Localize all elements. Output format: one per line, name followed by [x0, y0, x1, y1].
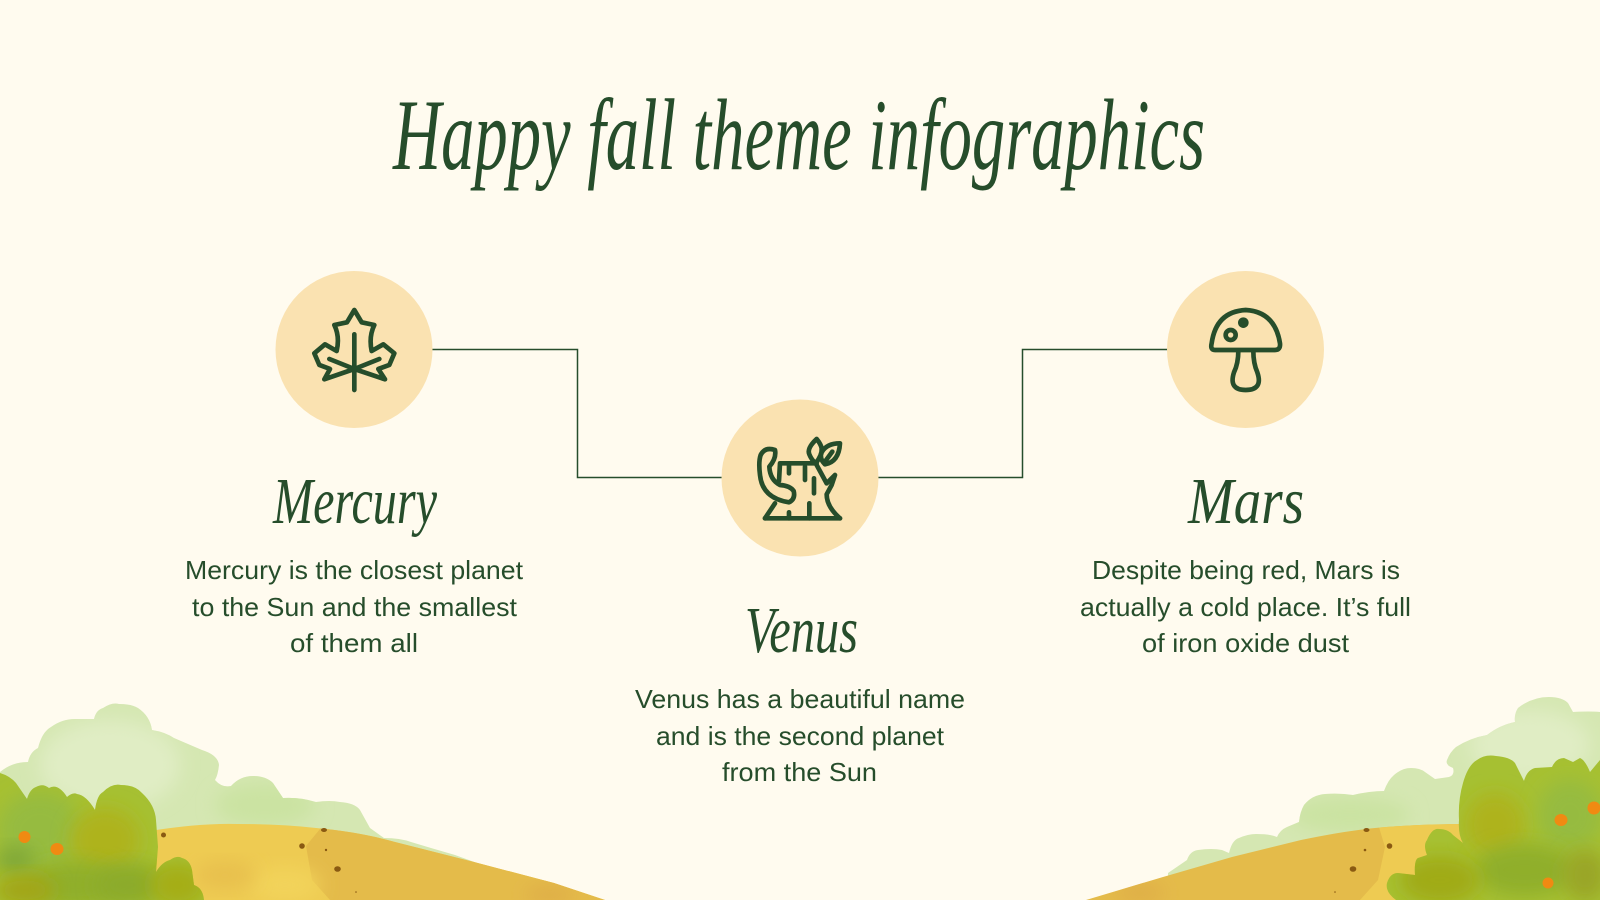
heading: Mars: Mars: [1187, 465, 1304, 538]
front bush right: [1380, 750, 1600, 900]
connector: Venus to Mars: [878, 350, 1168, 478]
text: Venus description: and is the second planet: [656, 721, 945, 751]
block: Venus: [635, 594, 965, 787]
heading: Venus: Venus: [745, 594, 858, 667]
landscape: left corner: [0, 700, 610, 900]
light green bushes left: [0, 704, 476, 862]
icon: Mars mushroom: [1167, 271, 1324, 428]
light green bushes right: [1168, 697, 1600, 876]
heading: Mercury: Mercury: [272, 465, 438, 538]
orange berries right: [1542, 802, 1600, 888]
soil dots right: [1334, 828, 1392, 893]
yellow hill right: [1086, 824, 1463, 900]
soil dots left: [161, 828, 357, 893]
landscape: right corner: [1080, 690, 1600, 900]
title: Happy fall theme infographics: [392, 79, 1205, 192]
yellow hill left: [156, 824, 605, 900]
text: Mars description: [1080, 555, 1411, 658]
text: Mercury description: of them all: [290, 628, 418, 658]
icon: Venus tree stump: [722, 400, 878, 556]
orange berries left: [18, 831, 64, 855]
text: Venus description: from the Sun: [722, 757, 877, 787]
connector: Mercury to Venus: [432, 350, 722, 478]
icon: Mercury maple leaf: [276, 271, 432, 428]
text: Venus description: [635, 684, 965, 787]
front bush left: [0, 770, 210, 900]
text: Mars description: of iron oxide dust: [1142, 628, 1350, 658]
text: Mercury description: Mercury is the closest planet: [185, 555, 524, 585]
text: Mercury description: to the Sun and the smallest: [192, 592, 518, 622]
text: Mercury description: [185, 555, 524, 658]
text: Mars description: actually a cold place. It’s full: [1080, 592, 1411, 622]
block: Mercury: [185, 465, 524, 658]
block: Mars: [1080, 465, 1411, 658]
text: Mars description: Despite being red, Mars is: [1092, 555, 1400, 585]
text: Venus description: Venus has a beautiful name: [635, 684, 965, 714]
